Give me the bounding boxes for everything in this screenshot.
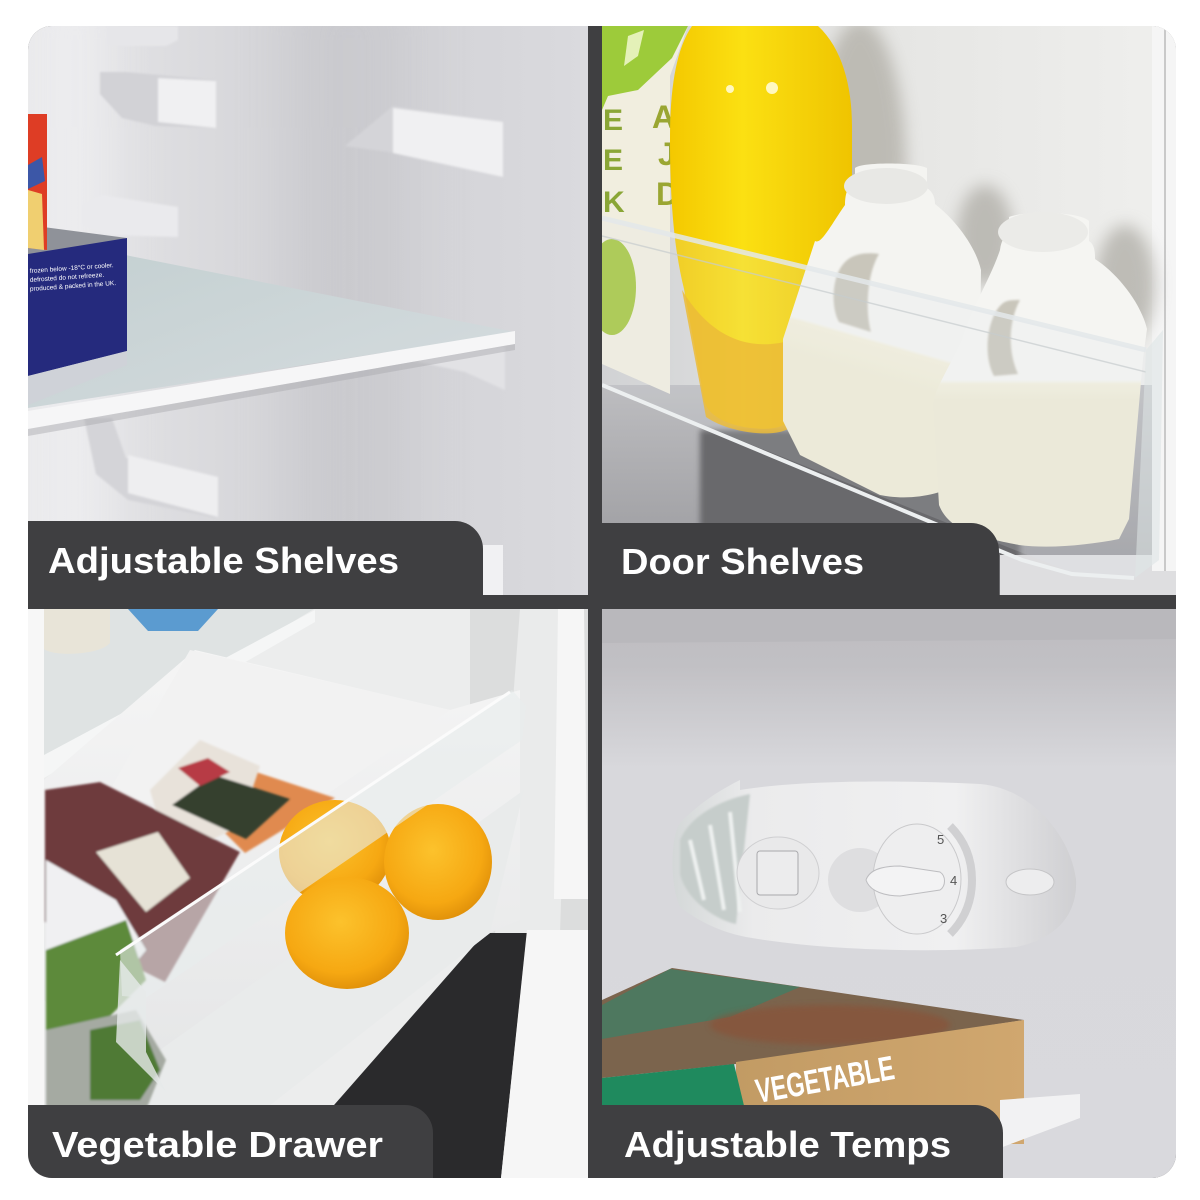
oranges xyxy=(279,800,492,989)
shelf rails xyxy=(82,26,505,518)
label: adjustable shelves xyxy=(28,521,483,595)
dial: 3 xyxy=(940,911,947,926)
orange packet xyxy=(28,114,47,250)
panel: adjustable temps xyxy=(602,609,1176,1178)
lower drawer front xyxy=(473,933,490,946)
panel: adjustable shelves xyxy=(28,26,588,595)
juice carton xyxy=(602,26,688,394)
carton lettering: E xyxy=(603,144,623,177)
glass shelf xyxy=(28,255,420,408)
upper shelf xyxy=(44,609,314,755)
fridge base xyxy=(334,933,527,1178)
label: adjustable shelves: Adjustable Shelves xyxy=(48,540,399,581)
milk jug right xyxy=(933,212,1147,547)
vegetable packs xyxy=(45,740,290,1110)
lower shelf bracket xyxy=(1000,1094,1080,1148)
carton lettering xyxy=(605,106,672,212)
label: door shelves xyxy=(602,523,999,595)
carton lettering: J xyxy=(658,136,676,172)
carton lettering: K xyxy=(603,186,625,219)
oval button xyxy=(1006,869,1054,895)
carton lettering: A xyxy=(652,99,675,135)
panel: door shelves xyxy=(582,20,1176,600)
blue box xyxy=(28,238,127,376)
carton lettering: D xyxy=(656,176,679,212)
yellow bottle xyxy=(670,26,852,429)
drawer front rim xyxy=(116,690,526,1092)
dial: 5 xyxy=(937,832,944,847)
square button xyxy=(737,837,819,909)
box small print: defrosted do not refreeze. xyxy=(30,272,105,284)
shadows xyxy=(830,26,914,176)
drawer body xyxy=(122,650,520,946)
milk jug left xyxy=(783,164,981,497)
panel: vegetable drawer xyxy=(28,609,588,1178)
box small print: produced & packed in the UK. xyxy=(30,280,116,293)
box small print: frozen below -18°C or cooler. xyxy=(30,261,114,275)
pizza box: VEGETABLE xyxy=(753,1049,897,1111)
label: adjustable temps: Adjustable Temps xyxy=(624,1124,951,1165)
carton lettering: E xyxy=(603,104,623,137)
label: door shelves: Door Shelves xyxy=(621,541,864,582)
dial xyxy=(828,824,972,934)
carrots xyxy=(225,770,335,853)
box small print xyxy=(30,261,116,293)
pizza box xyxy=(602,968,1024,1144)
dial: 4 xyxy=(950,873,957,888)
label: vegetable drawer xyxy=(28,1105,433,1178)
control housing xyxy=(672,780,1076,950)
label: vegetable drawer: Vegetable Drawer xyxy=(52,1124,383,1165)
door tray xyxy=(602,218,1163,578)
label: adjustable temps xyxy=(602,1105,1003,1178)
